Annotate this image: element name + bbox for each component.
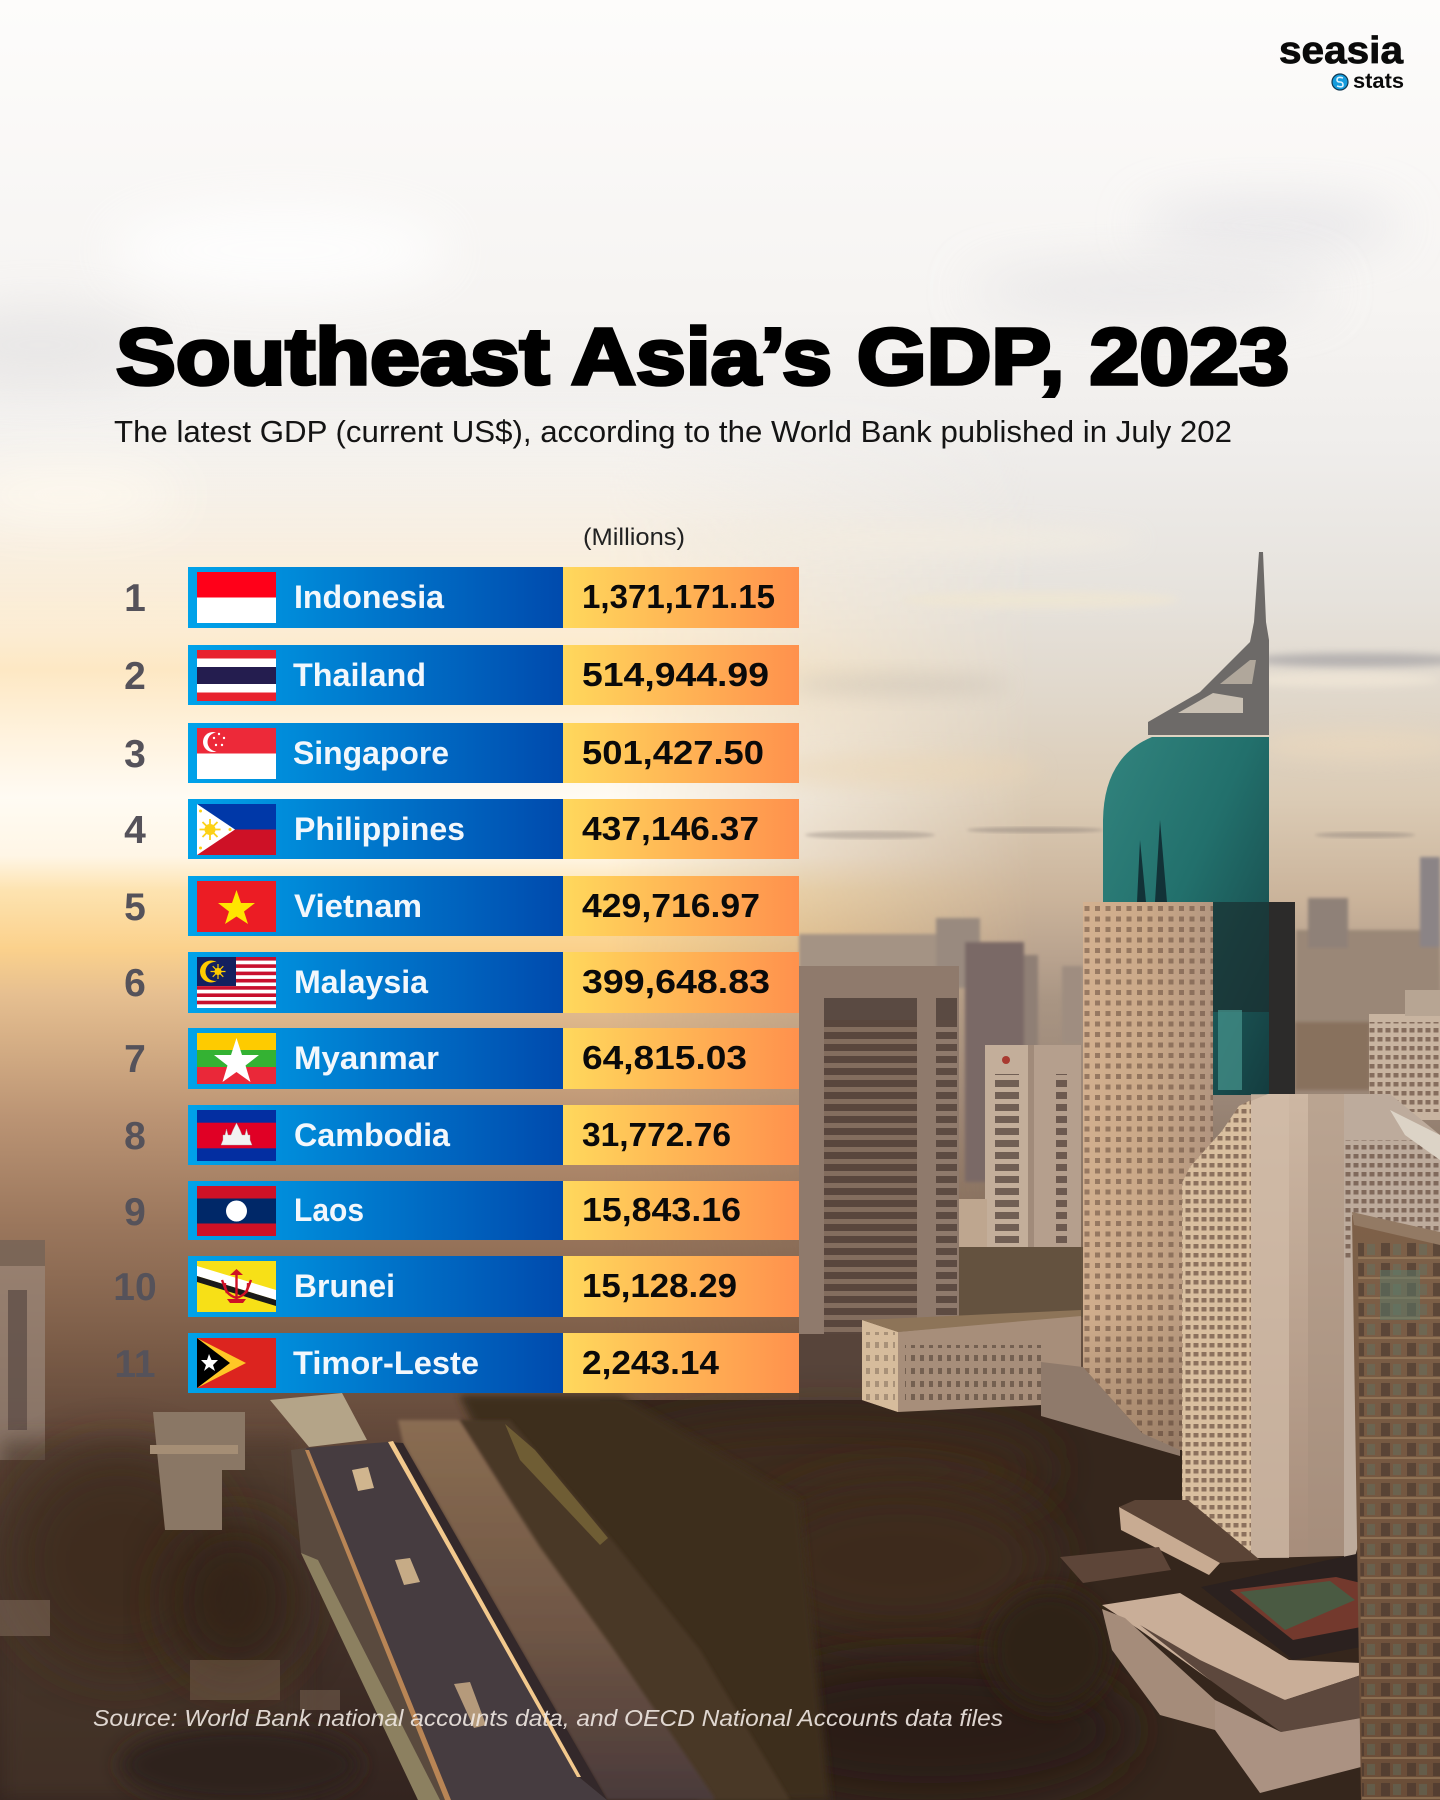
flag: Singapore bbox=[197, 728, 276, 779]
glass crown bbox=[1103, 737, 1269, 1095]
row 8: Cambodia: Cambodia bbox=[294, 1117, 450, 1153]
row 7: Myanmar bbox=[124, 1028, 799, 1089]
Wisma 46 tower bbox=[1083, 552, 1295, 1450]
source note: Source: World Bank national accounts data, and OECD National Accounts data files bbox=[93, 1705, 1004, 1731]
row 10: Brunei bbox=[113, 1256, 799, 1317]
canal bank and olive edge bbox=[459, 1420, 790, 1800]
row 4: Philippines: 4 bbox=[124, 809, 146, 852]
row 6: Malaysia: 6 bbox=[124, 962, 146, 1005]
stepped terrace building bbox=[1344, 1094, 1440, 1560]
row 10: Brunei: Brunei bbox=[294, 1268, 395, 1304]
logo subtext: stats bbox=[1353, 70, 1404, 93]
row 8: Cambodia: 8 bbox=[124, 1115, 146, 1158]
flag: Malaysia bbox=[197, 957, 276, 1008]
row 4: Philippines: 437,146.37 bbox=[582, 810, 759, 847]
subtitle: The latest GDP (current US$), according to the World Bank published in July 202 bbox=[114, 414, 1232, 449]
row 4: Philippines bbox=[124, 799, 799, 859]
row 1: Indonesia: Indonesia bbox=[294, 579, 444, 615]
row 11: Timor-Leste: Timor-Leste bbox=[293, 1345, 479, 1381]
row 1: Indonesia: 1,371,171.15 bbox=[582, 578, 775, 615]
podium with tennis court bbox=[1060, 1500, 1361, 1793]
ranking table bbox=[113, 567, 799, 1393]
row 7: Myanmar: 64,815.03 bbox=[582, 1039, 747, 1076]
row 7: Myanmar: Myanmar bbox=[294, 1040, 439, 1076]
logo globe icon bbox=[1332, 74, 1348, 90]
row 5: Vietnam bbox=[124, 876, 799, 936]
flag: Indonesia bbox=[197, 572, 276, 623]
row 6: Malaysia bbox=[124, 952, 799, 1013]
row 9: Laos: 9 bbox=[124, 1191, 146, 1234]
row 9: Laos: 15,843.16 bbox=[582, 1191, 741, 1228]
low annex building bbox=[862, 1310, 1180, 1456]
row 3: Singapore: 501,427.50 bbox=[582, 734, 764, 771]
row 3: Singapore: Singapore bbox=[293, 735, 449, 771]
far right building bbox=[1369, 990, 1440, 1120]
logo wordmark: seasia bbox=[1279, 30, 1404, 72]
elevated roadway bbox=[270, 1393, 607, 1800]
row 1: Indonesia bbox=[124, 567, 799, 628]
hotel tower bbox=[1182, 1094, 1344, 1558]
tower spire bbox=[1148, 552, 1269, 735]
row 9: Laos bbox=[124, 1181, 799, 1240]
river canal bbox=[398, 1420, 714, 1800]
dark residential tower at right bbox=[1352, 1212, 1440, 1800]
flag: Timor-Leste bbox=[197, 1338, 276, 1388]
row 5: Vietnam: 5 bbox=[124, 886, 146, 929]
trees and ground bbox=[0, 1400, 1440, 1800]
row 9: Laos: Laos bbox=[294, 1192, 364, 1228]
row 4: Philippines: Philippines bbox=[294, 811, 465, 847]
row 8: Cambodia: 31,772.76 bbox=[582, 1116, 731, 1153]
row 2: Thailand bbox=[124, 645, 799, 705]
flag: Philippines bbox=[197, 804, 276, 855]
row 6: Malaysia: Malaysia bbox=[294, 964, 428, 1000]
flag: Cambodia bbox=[197, 1110, 276, 1161]
row 11: Timor-Leste bbox=[114, 1333, 799, 1393]
flag: Myanmar bbox=[197, 1033, 276, 1084]
row 11: Timor-Leste: 11 bbox=[114, 1343, 156, 1386]
flag: Thailand bbox=[197, 650, 276, 701]
row 3: Singapore: 3 bbox=[124, 733, 146, 776]
unit label: (Millions) bbox=[583, 524, 685, 551]
flag: Vietnam bbox=[197, 881, 276, 932]
logo: seasia stats bbox=[1279, 30, 1404, 93]
canal bank trees bbox=[459, 1395, 830, 1800]
flag: Laos bbox=[197, 1186, 276, 1236]
row 2: Thailand: Thailand bbox=[293, 657, 426, 693]
row 10: Brunei: 15,128.29 bbox=[582, 1267, 737, 1304]
row 5: Vietnam: 429,716.97 bbox=[582, 887, 760, 924]
row 6: Malaysia: 399,648.83 bbox=[582, 963, 770, 1000]
row 5: Vietnam: Vietnam bbox=[294, 888, 422, 924]
tan lower tower bbox=[1083, 902, 1213, 1450]
striped office tower bbox=[799, 966, 959, 1400]
row 2: Thailand: 2 bbox=[124, 655, 146, 698]
row 3: Singapore bbox=[124, 723, 799, 783]
flag: Brunei bbox=[197, 1261, 276, 1312]
row 7: Myanmar: 7 bbox=[124, 1038, 146, 1081]
hazy distant skyline bbox=[799, 857, 1440, 1182]
row 10: Brunei: 10 bbox=[113, 1266, 157, 1309]
row 8: Cambodia bbox=[124, 1105, 799, 1165]
row 11: Timor-Leste: 2,243.14 bbox=[582, 1344, 720, 1381]
dark side wing bbox=[1269, 902, 1295, 1094]
white mid-rise with red logo bbox=[959, 1045, 1083, 1317]
left neighbourhood bbox=[0, 1412, 340, 1710]
title: Southeast Asia’s GDP, 2023 bbox=[116, 312, 1289, 401]
row 1: Indonesia: 1 bbox=[124, 577, 146, 620]
row 2: Thailand: 514,944.99 bbox=[582, 656, 769, 693]
left grey building bbox=[0, 1240, 45, 1460]
